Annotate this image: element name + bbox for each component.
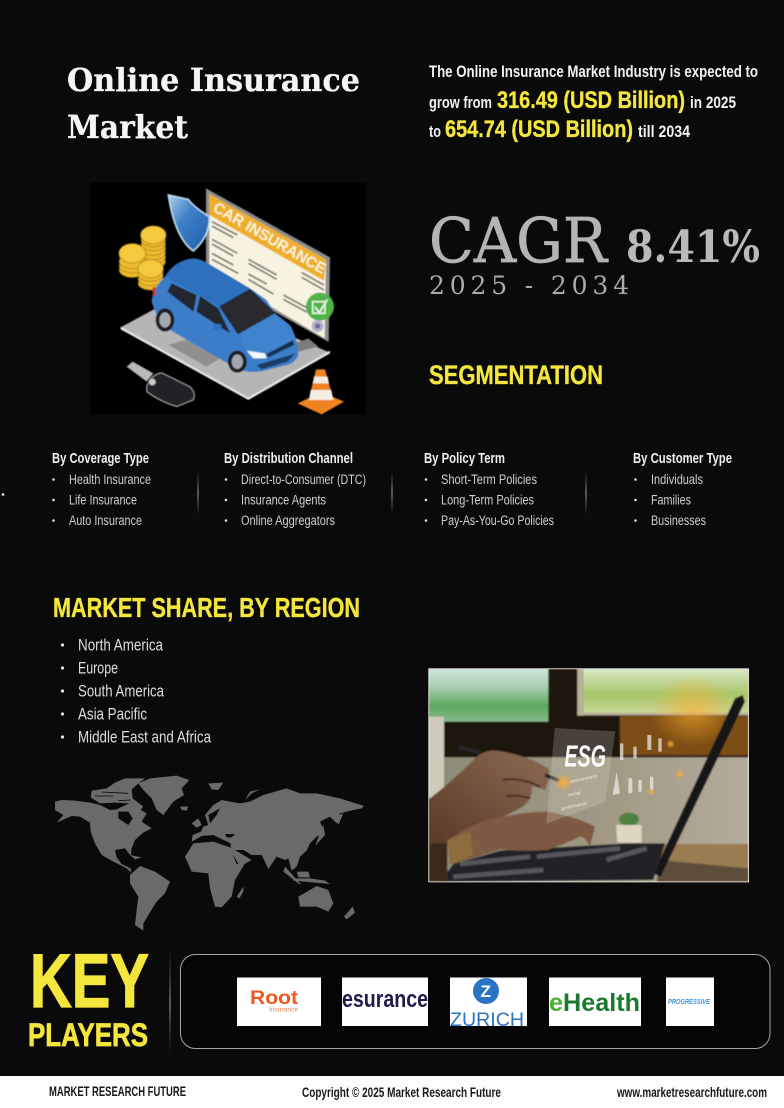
- icon: insurance document: [206, 188, 330, 342]
- segment: by distribution channel: By Distribution Channel: [224, 450, 353, 467]
- region list: South America: [78, 682, 165, 700]
- illustration: car insurance: [91, 183, 366, 414]
- key players logo panel: [180, 954, 770, 1048]
- icon: coin stacks: [119, 226, 166, 290]
- segment: by policy term: Long-Term Policies: [441, 492, 534, 508]
- segment: by distribution channel: [224, 450, 366, 528]
- market forecast statement: 654.74 (USD Billion): [445, 116, 633, 143]
- icon: blue car: [152, 258, 298, 373]
- segment: by distribution channel: Online Aggregators: [241, 513, 335, 528]
- market forecast statement: [429, 62, 758, 143]
- region list: [61, 636, 212, 746]
- ESG hologram: social: [568, 790, 581, 799]
- segment: by policy term: Pay-As-You-Go Policies: [441, 513, 554, 528]
- logo: esurance: [342, 978, 428, 1026]
- segment: by coverage type: By Coverage Type: [52, 450, 149, 467]
- logo: Zurich: ZURICH: [450, 1010, 524, 1031]
- segment: by customer type: Businesses: [651, 513, 706, 528]
- market forecast statement: grow from: [429, 93, 492, 112]
- logo: Progressive: [666, 978, 714, 1026]
- footer: [0, 1076, 784, 1108]
- region list: Middle East and Africa: [78, 728, 212, 746]
- segment: by coverage type: Auto Insurance: [69, 513, 142, 528]
- ESG hologram: [547, 728, 685, 823]
- logo: eHealth: [549, 978, 641, 1026]
- logo: Progressive: PROGRESSIVE: [668, 999, 710, 1006]
- footer: Copyright © 2025 Market Research Future: [302, 1084, 501, 1100]
- market forecast statement: in 2025: [690, 93, 736, 112]
- title: [67, 61, 360, 146]
- segment: by coverage type: Health Insurance: [69, 472, 151, 487]
- segment: by distribution channel: Insurance Agents: [241, 492, 326, 508]
- segment: by coverage type: Life Insurance: [69, 492, 137, 508]
- region list: Asia Pacific: [78, 706, 147, 724]
- region list: Europe: [78, 660, 118, 678]
- CAGR statistic: [429, 204, 760, 300]
- market forecast statement: 316.49 (USD Billion): [497, 87, 685, 114]
- footer: MARKET RESEARCH FUTURE: [49, 1083, 186, 1099]
- key players heading: [28, 939, 149, 1053]
- segment: by customer type: Families: [651, 492, 691, 508]
- logo: esurance: esurance: [342, 986, 428, 1013]
- logo: Root Insurance: [237, 978, 321, 1026]
- segment: by policy term: By Policy Term: [424, 450, 505, 467]
- heading: segmentation: SEGMENTATION: [429, 360, 603, 390]
- segment: by policy term: [424, 450, 554, 528]
- icon: platform: [121, 292, 330, 400]
- logo: Root Insurance: Root: [250, 988, 299, 1009]
- CAGR statistic: CAGR: [429, 204, 609, 277]
- icon: traffic cone: [298, 369, 344, 414]
- world map: [55, 776, 364, 931]
- icon: car key: [127, 362, 194, 407]
- photo: ESG laptop: [428, 668, 749, 882]
- logo: eHealth: eHealth: [549, 989, 640, 1017]
- segment: by customer type: [633, 450, 732, 528]
- CAGR statistic: 8.41%: [626, 222, 760, 273]
- market forecast statement: till 2034: [638, 122, 690, 141]
- logo: Zurich: [450, 978, 527, 1031]
- segment: by policy term: Short-Term Policies: [441, 472, 537, 487]
- logo: Zurich: Z: [480, 982, 491, 1001]
- ESG hologram: governance: [561, 801, 588, 812]
- title: Online Insurance: [67, 61, 360, 99]
- icon: insurance document: CAR INSURANCE: [210, 199, 329, 278]
- CAGR statistic: 2025 - 2034: [429, 271, 629, 300]
- segment: by customer type: By Customer Type: [633, 450, 732, 467]
- market forecast statement: to: [429, 122, 441, 141]
- icon: shield: [168, 195, 209, 251]
- ESG hologram: ESG: [564, 740, 606, 774]
- region list: North America: [78, 636, 164, 654]
- stray dot: [2, 493, 4, 496]
- icon: check badge: [306, 293, 334, 332]
- segment: by distribution channel: Direct-to-Consumer (DTC): [241, 472, 366, 487]
- key players heading: KEY: [30, 939, 149, 1024]
- segment: by customer type: Individuals: [651, 472, 703, 487]
- ESG hologram: environment: [569, 774, 598, 785]
- segment: by coverage type: [52, 450, 151, 528]
- logo: Root Insurance: Insurance: [269, 1008, 299, 1014]
- heading: market share by region: MARKET SHARE, BY REGION: [53, 592, 360, 623]
- key players heading: PLAYERS: [28, 1017, 148, 1053]
- title: Market: [67, 108, 188, 146]
